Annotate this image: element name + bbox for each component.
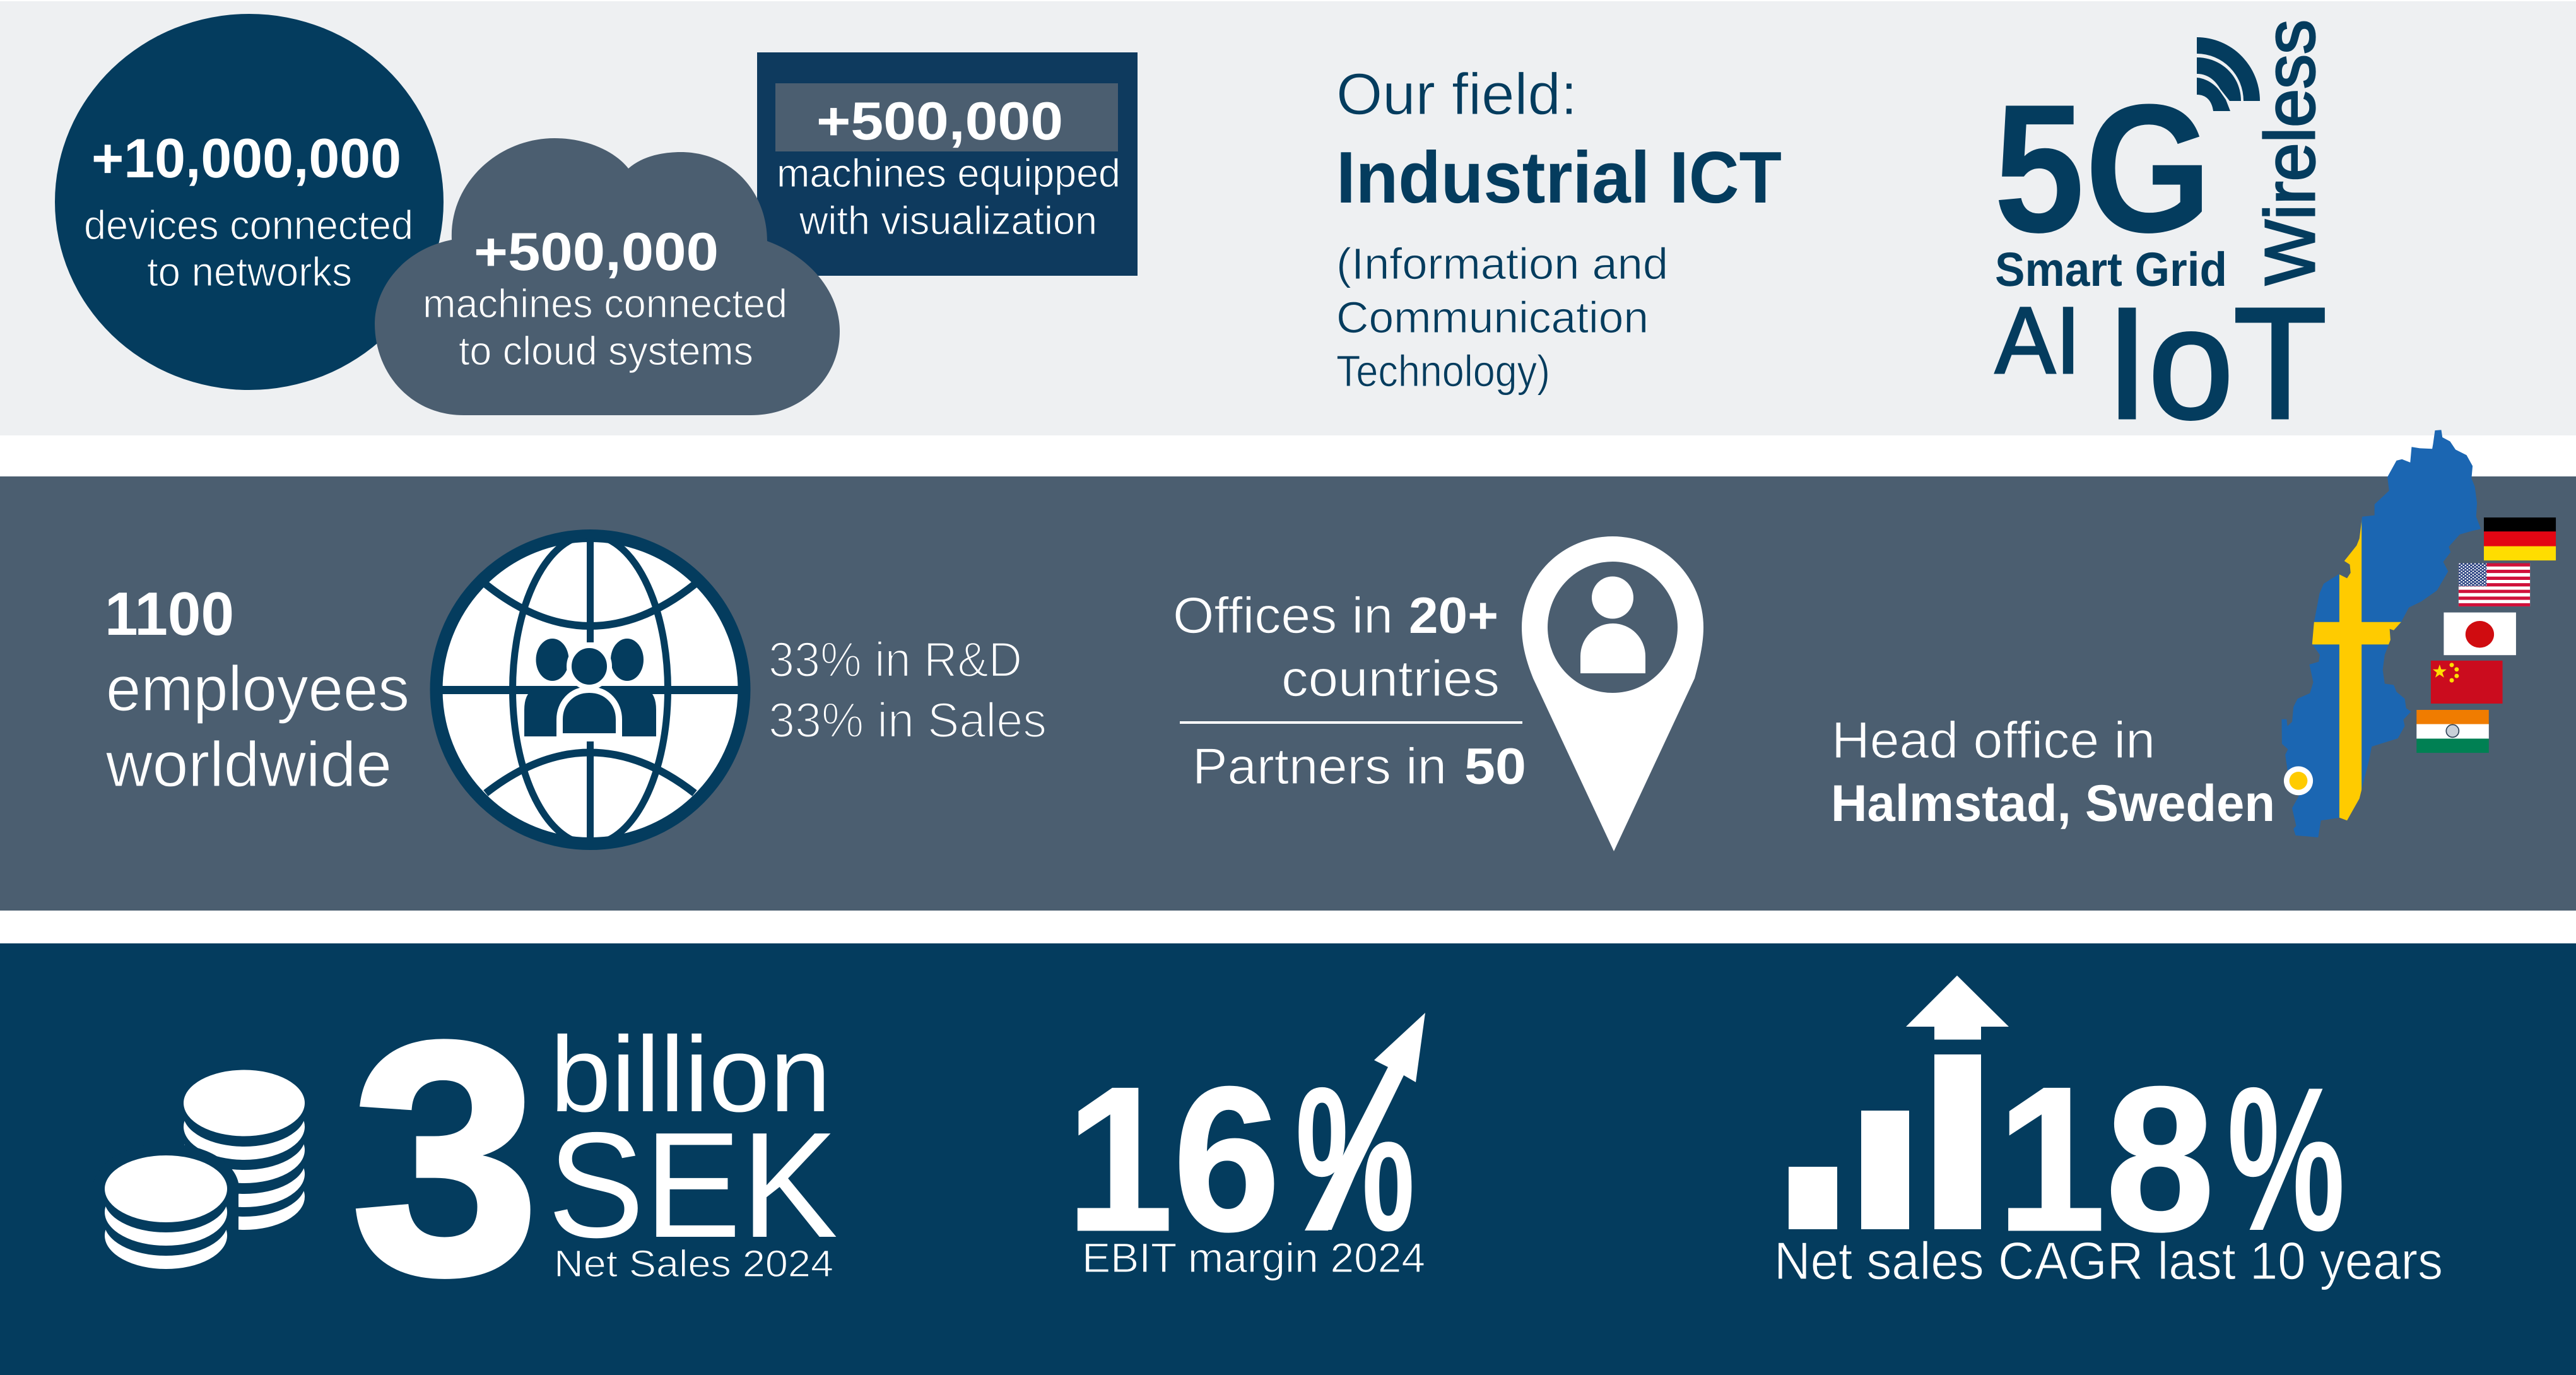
- offices and partners text: 50: [1464, 738, 1526, 795]
- CAGR label: Net sales CAGR last 10 years: [1774, 1231, 2443, 1290]
- Sweden shape: [2277, 429, 2486, 840]
- employees text: employees: [106, 654, 409, 724]
- panel: top background: [0, 1, 2576, 435]
- heading: our field: Our field:: [1336, 61, 1577, 127]
- rising bars with arrow: [1789, 976, 2009, 1229]
- icon: globe with people: [435, 535, 744, 846]
- percent sign: %: [1295, 1044, 1415, 1273]
- field description: Technology): [1336, 346, 1550, 396]
- arrow: [1305, 1013, 1425, 1230]
- devices number: +10,000,000: [91, 127, 401, 189]
- devices label: [84, 202, 413, 295]
- devices label: devices connected: [84, 202, 413, 248]
- big number 3: 3: [351, 974, 540, 1343]
- icon: coin stacks: [93, 1070, 305, 1284]
- net sales figure: [351, 974, 838, 1343]
- IoT: IoT: [2106, 275, 2327, 451]
- flag: USA: [2459, 564, 2530, 606]
- circle shape: [55, 14, 444, 390]
- smart grid: Smart Grid: [1995, 243, 2227, 297]
- panel: devices circle: [55, 14, 444, 390]
- heading: industrial ICT: Industrial ICT: [1336, 136, 1782, 218]
- net sales label: Net Sales 2024: [554, 1242, 833, 1285]
- panel: middle background: [0, 476, 2576, 911]
- CAGR figure: [1774, 976, 2443, 1290]
- devices label: to networks: [147, 249, 352, 295]
- field description: [1336, 239, 1668, 396]
- employees text: [105, 579, 409, 800]
- field description: Communication: [1336, 293, 1649, 342]
- visualization label: [777, 151, 1120, 243]
- offices and partners text: Offices in: [1173, 587, 1393, 644]
- employees text: 1100: [105, 579, 234, 648]
- panel: cloud: [375, 138, 840, 415]
- staff split text: 33% in R&D: [768, 632, 1022, 687]
- offices and partners text: countries: [1281, 651, 1500, 707]
- 18: 18: [1997, 1044, 2214, 1273]
- technology word cloud: [1994, 20, 2329, 451]
- box shape: [757, 52, 1138, 276]
- location marker: [2284, 766, 2313, 795]
- offices and partners text: [1173, 587, 1526, 795]
- billion: billion: [550, 1015, 831, 1135]
- map: Sweden with flags: [2277, 429, 2556, 840]
- 5G: 5G: [1994, 66, 2212, 271]
- 16: 16: [1066, 1044, 1280, 1273]
- flag: Japan: [2444, 613, 2516, 655]
- percent sign: %: [2227, 1044, 2345, 1273]
- number background: [775, 83, 1118, 151]
- employees text: worldwide: [105, 729, 392, 800]
- cloud label: machines connected: [423, 281, 787, 326]
- icon: map pin: [1522, 536, 1703, 851]
- panel: bottom background: [0, 943, 2576, 1375]
- cloud shape: [375, 138, 840, 415]
- flag: India: [2416, 710, 2489, 753]
- wireless: Wireless: [2250, 20, 2329, 285]
- visualization label: machines equipped: [777, 151, 1120, 196]
- SEK: SEK: [548, 1102, 838, 1269]
- AI: AI: [1995, 287, 2081, 393]
- panel: visualization box: [757, 52, 1138, 276]
- head office text: [1831, 712, 2275, 832]
- cloud label: to cloud systems: [459, 328, 753, 374]
- head office text: Head office in: [1832, 712, 2155, 769]
- cloud label: [423, 281, 787, 374]
- cloud number: +500,000: [474, 222, 719, 282]
- visualization label: with visualization: [799, 199, 1097, 243]
- flag: Germany: [2484, 517, 2556, 560]
- field description: (Information and: [1336, 239, 1668, 288]
- staff split text: [768, 632, 1047, 748]
- EBIT figure: [1066, 1013, 1425, 1281]
- offices and partners text: Partners in: [1192, 738, 1447, 795]
- heading: our field: [1336, 61, 1782, 396]
- visualization number: +500,000: [816, 91, 1063, 151]
- staff split text: 33% in Sales: [768, 692, 1047, 748]
- flag: China: [2431, 661, 2503, 704]
- icon: wireless signal: [2197, 37, 2260, 111]
- head office text: Halmstad, Sweden: [1831, 775, 2275, 832]
- offices and partners text: 20+: [1409, 587, 1498, 644]
- EBIT label: EBIT margin 2024: [1082, 1234, 1425, 1281]
